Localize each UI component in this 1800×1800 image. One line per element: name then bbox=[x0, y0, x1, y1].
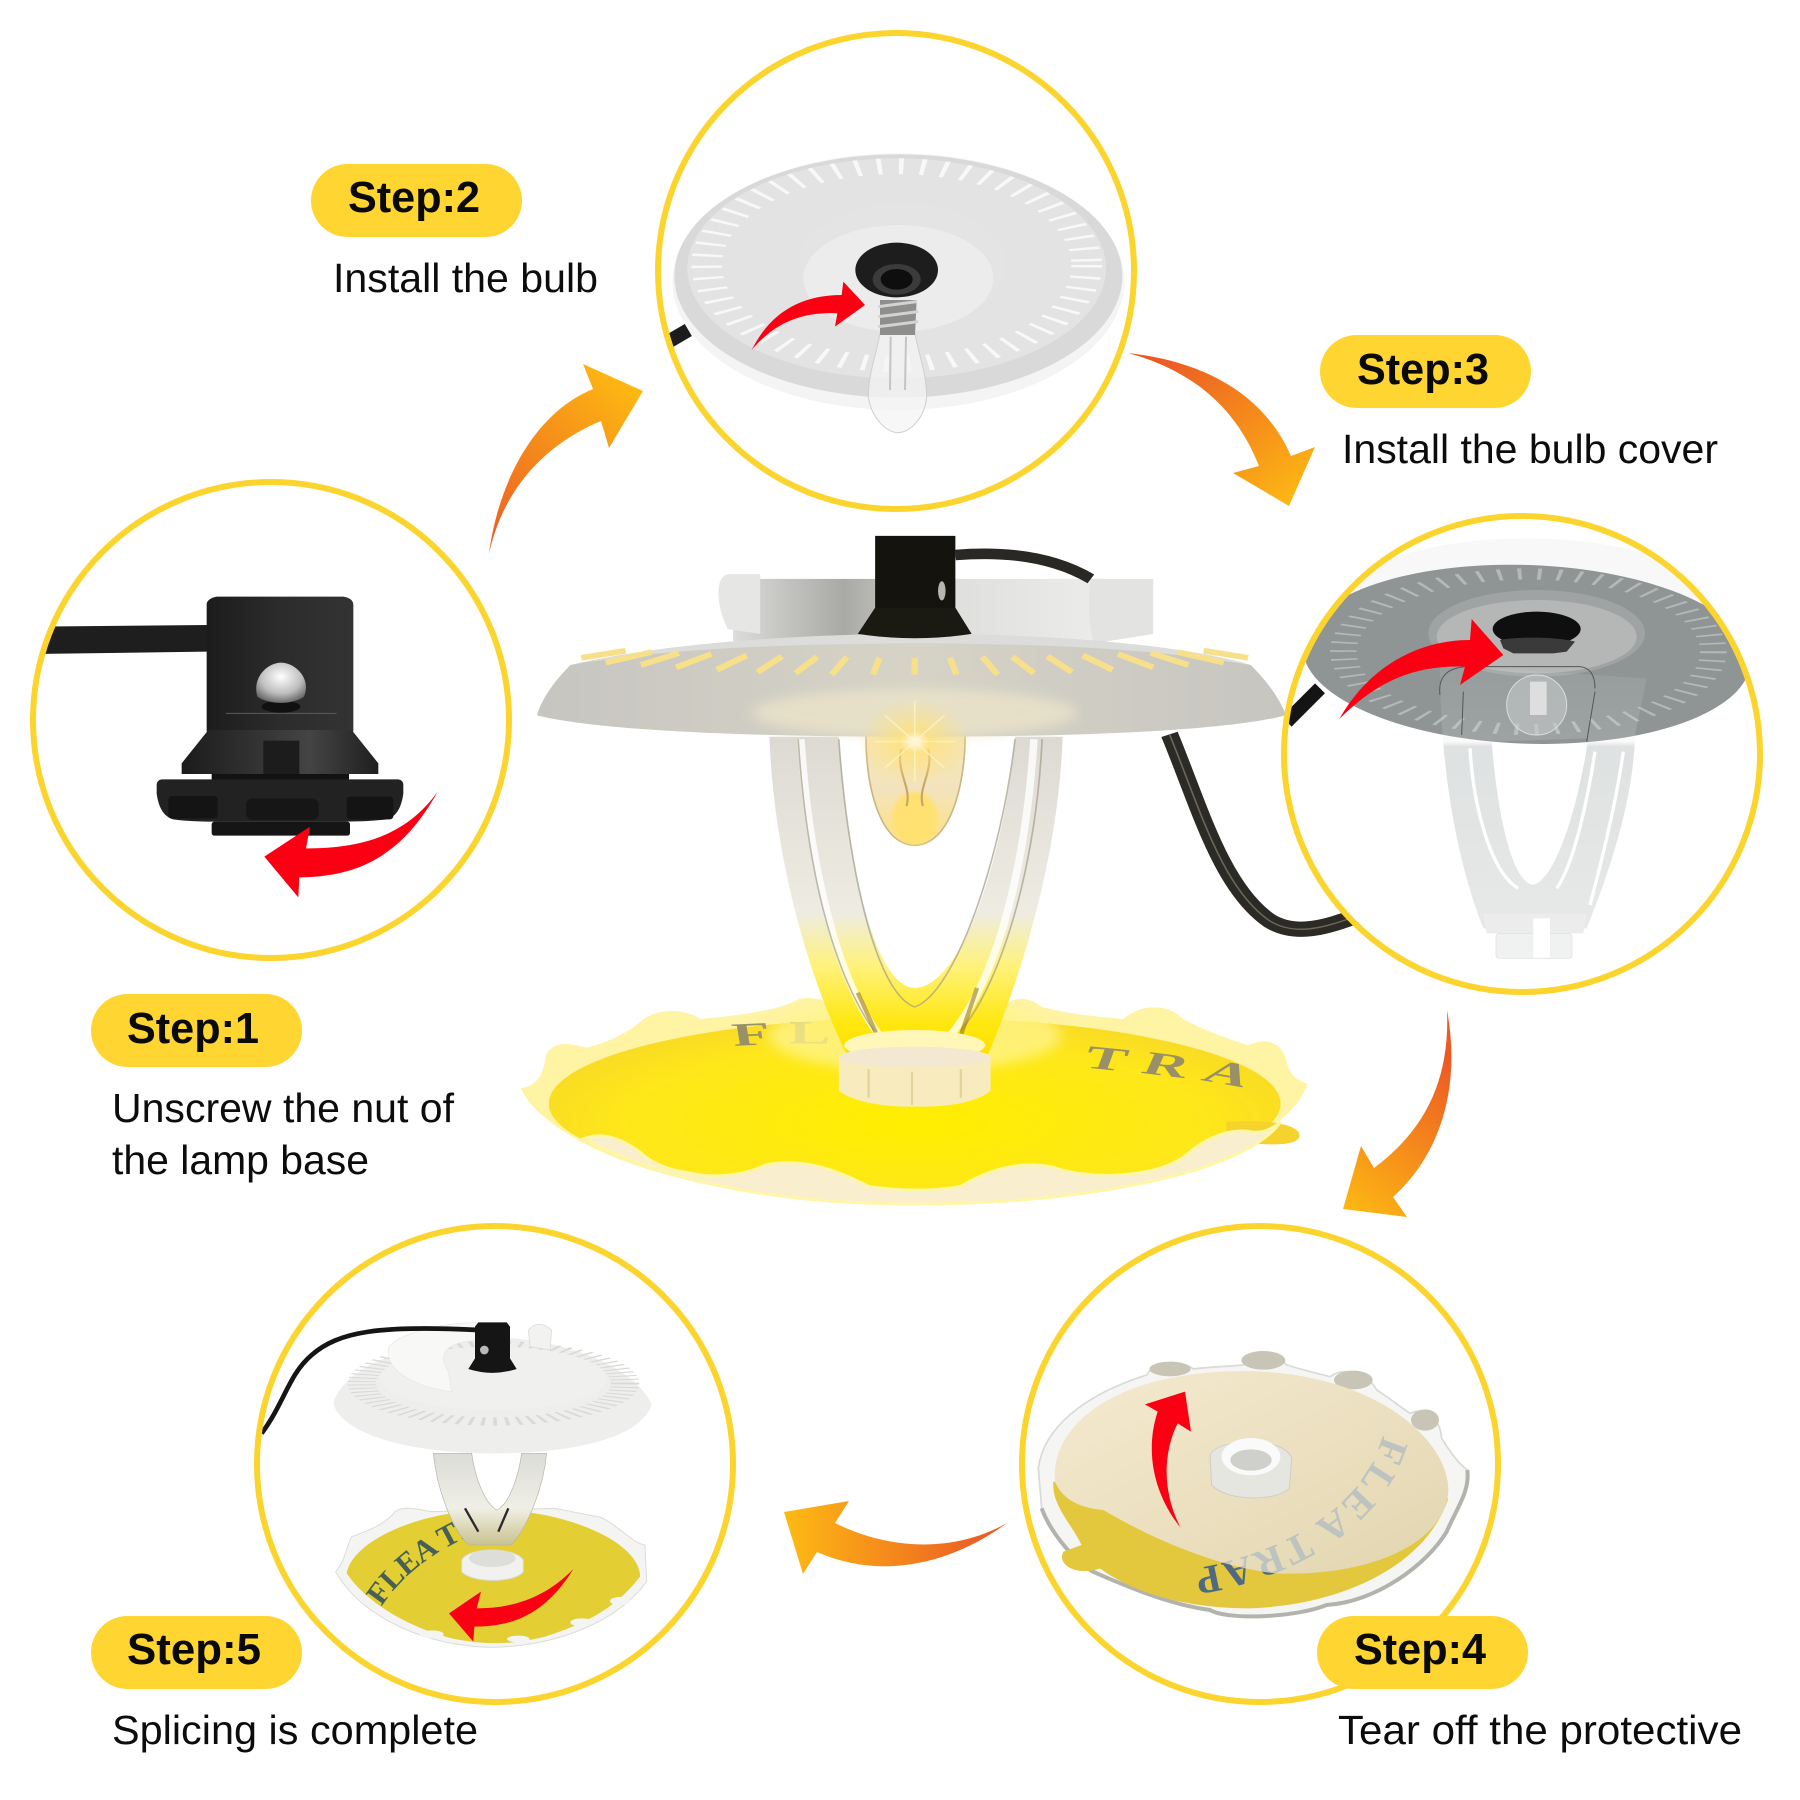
step 5 description: Splicing is complete bbox=[112, 1707, 478, 1753]
central lamp bbox=[520, 536, 1353, 1206]
red arrow bbox=[449, 1569, 573, 1642]
step 3 label bbox=[1320, 335, 1531, 408]
step 2 label: Step:2 bbox=[348, 173, 480, 222]
cream tray lip bbox=[584, 1122, 1281, 1204]
back text on yellow: FLEA TRAP bbox=[1198, 1562, 1276, 1593]
white tray bbox=[336, 1508, 647, 1647]
arrow: step 3 to 4 bbox=[1343, 1010, 1451, 1217]
lower scallops bbox=[420, 1597, 630, 1642]
vent slits bbox=[707, 166, 1087, 364]
cable bbox=[46, 625, 207, 654]
bracket bbox=[388, 1323, 552, 1392]
disc tab bbox=[1226, 1121, 1300, 1144]
disc text: FLEA TRAP bbox=[731, 1022, 1243, 1088]
red arrow bbox=[1145, 1392, 1191, 1528]
black nut bbox=[1492, 612, 1581, 640]
arrow: step 4 to 5 bbox=[784, 1501, 1007, 1574]
lamp shade bbox=[537, 634, 1286, 737]
red arrow bbox=[1339, 619, 1503, 719]
step 1 description: the lamp base bbox=[112, 1137, 369, 1183]
yellow sticky disc bbox=[549, 1018, 1281, 1190]
panel: step 1 circle bbox=[33, 482, 509, 958]
grey underside bbox=[1306, 564, 1745, 744]
step 4 label bbox=[1317, 1616, 1528, 1689]
step 1 description bbox=[112, 1085, 455, 1183]
shade bbox=[333, 1338, 652, 1453]
cord bbox=[262, 1328, 478, 1433]
panel: step 4 circle bbox=[1019, 1223, 1501, 1705]
flared collar bbox=[182, 730, 378, 774]
step 5 label: Step:5 bbox=[127, 1625, 261, 1674]
bulb bbox=[866, 734, 965, 845]
base tray rim bbox=[521, 998, 1308, 1204]
clear cover bbox=[1440, 665, 1647, 958]
top face bbox=[380, 1347, 607, 1410]
ribbed nut bbox=[157, 779, 403, 836]
step 4 label: Step:4 bbox=[1354, 1625, 1487, 1674]
disc text: FLEA TRAP bbox=[366, 1522, 463, 1606]
white nut bbox=[462, 1550, 523, 1580]
step 5 label bbox=[91, 1616, 302, 1689]
metal ball bbox=[256, 663, 306, 713]
yellow disc bbox=[347, 1510, 640, 1643]
panel: step 5 circle bbox=[254, 1223, 736, 1705]
cream protective film bbox=[1055, 1371, 1448, 1574]
clear bulb cover bbox=[768, 737, 1063, 1072]
clear cover bbox=[433, 1453, 547, 1545]
yellow backing bbox=[1053, 1482, 1448, 1608]
bulb bbox=[868, 300, 927, 433]
lamp socket bbox=[858, 536, 1091, 638]
step 2 description: Install the bulb bbox=[333, 255, 598, 301]
step 2 label bbox=[311, 164, 522, 237]
step 4 description: Tear off the protective bbox=[1338, 1707, 1742, 1753]
power cord bbox=[1169, 734, 1357, 929]
white shade top bbox=[1307, 538, 1747, 725]
nut bbox=[1210, 1438, 1292, 1498]
panel: step 2 circle bbox=[658, 33, 1134, 509]
light glow bbox=[858, 698, 972, 785]
arrow: step 2 to 3 bbox=[1128, 353, 1315, 506]
silver lower rim bbox=[1042, 1470, 1468, 1616]
step 1 label bbox=[91, 994, 302, 1067]
vent slits bbox=[362, 1345, 625, 1422]
socket body bbox=[207, 597, 353, 732]
clear scalloped tray bbox=[1038, 1354, 1468, 1616]
tray scallops bbox=[1149, 1351, 1439, 1431]
socket bbox=[468, 1322, 517, 1373]
shade underside bbox=[672, 153, 1124, 410]
bracket bbox=[718, 574, 1153, 643]
film text: FLEA TRAP bbox=[1223, 1436, 1408, 1574]
cord stub bbox=[668, 330, 688, 342]
inner hub bbox=[798, 203, 1005, 327]
vent slits bbox=[1343, 574, 1713, 729]
panel: step 3 circle bbox=[1284, 516, 1760, 992]
step 3 label: Step:3 bbox=[1357, 345, 1489, 394]
red arrow bbox=[264, 792, 438, 897]
cord stub bbox=[1287, 688, 1320, 722]
step 3 description: Install the bulb cover bbox=[1342, 426, 1718, 472]
step 1 label: Step:1 bbox=[127, 1004, 259, 1053]
vent slits bbox=[581, 651, 1248, 675]
arrow: step 1 to 2 bbox=[489, 364, 643, 554]
hex nut bbox=[839, 1047, 991, 1107]
black nut bbox=[855, 243, 938, 297]
red arrow bbox=[752, 282, 865, 350]
step 1 description: Unscrew the nut of bbox=[112, 1085, 455, 1131]
inner hub bbox=[1428, 590, 1645, 677]
